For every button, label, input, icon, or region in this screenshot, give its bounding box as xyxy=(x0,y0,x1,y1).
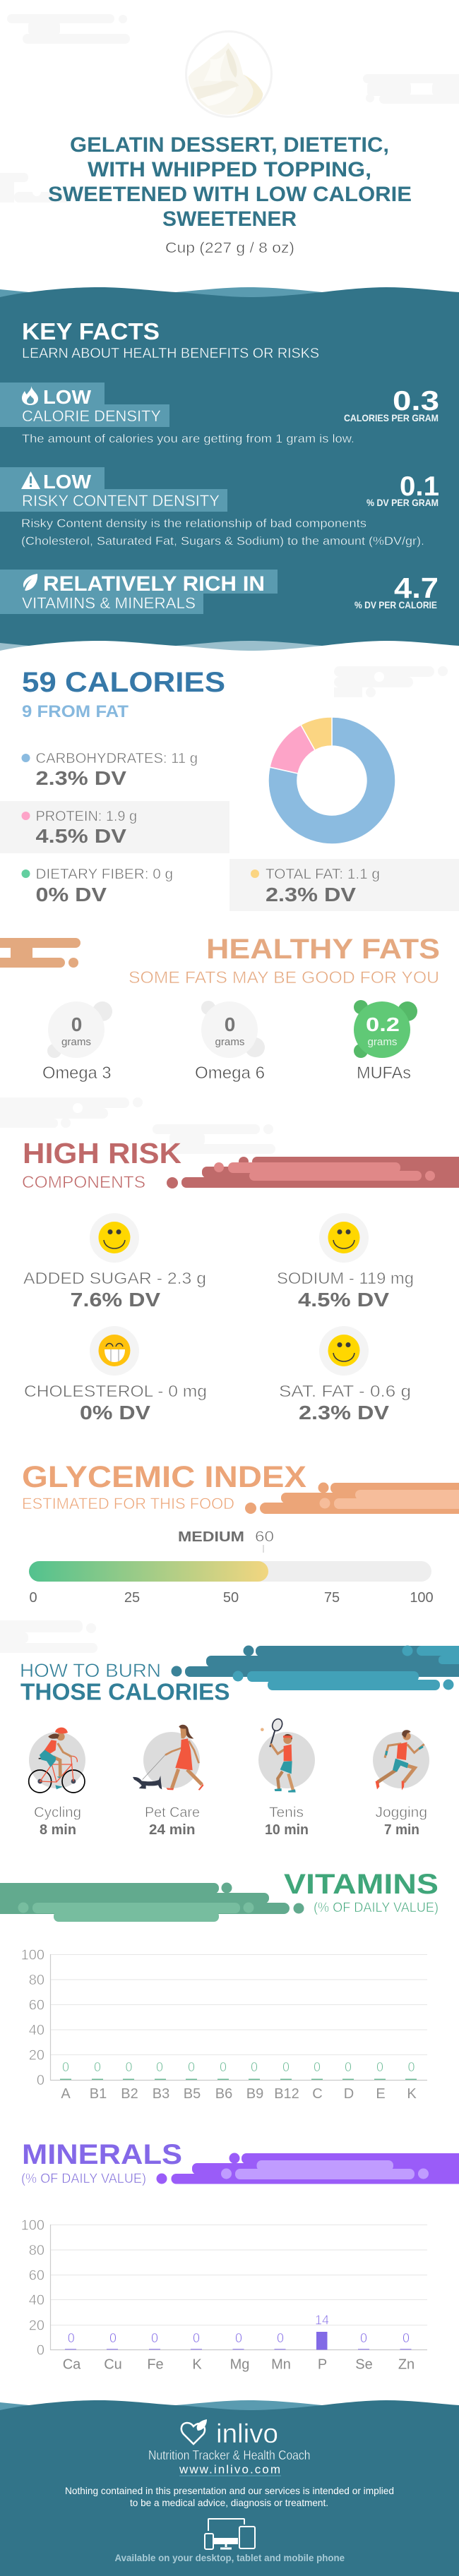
chart: minerals bar chart: Mg xyxy=(230,2357,249,2373)
risk: cholesterol xyxy=(24,1326,207,1424)
fact: vitamins and minerals: RELATIVELY RICH IN xyxy=(43,572,265,596)
chart: vitamins bar chart: B3 xyxy=(153,2086,169,2102)
chart: vitamins bar chart: 0 xyxy=(188,2060,195,2074)
fact: risky content density: LOW xyxy=(43,471,92,493)
heading: healthy fats: HEALTHY FATS xyxy=(206,934,440,965)
disclaimer: to be a medical advice, diagnosis or treatment. xyxy=(130,2497,328,2508)
heading: minerals: MINERALS xyxy=(22,2139,182,2170)
fact: risky content density: (Cholesterol, Saturated Fat, Sugars & Sodium) to the amount (%DV/gr). xyxy=(21,535,424,548)
chart: minerals bar chart: Mn xyxy=(271,2357,291,2373)
activity: cycling xyxy=(29,1728,85,1838)
fact: risky content density: % DV PER GRAM xyxy=(366,497,439,508)
chart: vitamins bar chart: 0 xyxy=(407,2060,415,2074)
fact: risky content density: RISKY CONTENT DENSITY xyxy=(22,492,220,510)
chart: vitamins bar chart: 80 xyxy=(29,1973,44,1988)
chart: minerals bar chart: 40 xyxy=(29,2292,44,2308)
legend: total fat: TOTAL FAT: 1.1 g xyxy=(266,867,380,882)
chart: glycemic index gauge: MEDIUM xyxy=(178,1529,244,1545)
chart: vitamins bar chart: 0 xyxy=(156,2060,163,2074)
risk: saturated fat xyxy=(279,1326,411,1424)
chart: vitamins bar chart: A xyxy=(61,2086,71,2102)
subheading: LEARN ABOUT HEALTH BENEFITS OR RISKS xyxy=(22,346,319,361)
subheading: estimated: ESTIMATED FOR THIS FOOD xyxy=(22,1495,234,1512)
legend: protein: 4.5% DV xyxy=(35,825,126,847)
fact: vitamins and minerals: VITAMINS & MINERALS xyxy=(22,594,196,612)
icon: grin xyxy=(99,1335,130,1366)
risk: added sugar: ADDED SUGAR - 2.3 g xyxy=(23,1269,206,1287)
chart: glycemic index gauge: 25 xyxy=(124,1590,140,1606)
chart: glycemic index gauge: 60 xyxy=(255,1529,274,1545)
fact: vitamins and minerals: 4.7 xyxy=(394,572,439,604)
chart: minerals bar chart: K xyxy=(192,2357,202,2373)
chart: minerals bar chart: Ca xyxy=(63,2357,81,2373)
chart: glycemic index gauge: 50 xyxy=(223,1590,239,1606)
chart: minerals bar chart xyxy=(21,2217,427,2373)
chart: vitamins bar chart: B9 xyxy=(246,2086,263,2102)
chart: minerals bar chart: Zn xyxy=(398,2357,415,2373)
chart: glycemic index gauge: 0 xyxy=(29,1590,37,1606)
title: GELATIN DESSERT, DIETETIC, xyxy=(70,133,389,157)
chart: minerals bar chart: 0 xyxy=(193,2331,200,2345)
risk: added sugar xyxy=(23,1213,206,1311)
subheading: components: COMPONENTS xyxy=(22,1173,145,1192)
heading: high risk: HIGH RISK xyxy=(23,1137,181,1169)
chart: minerals bar chart: Cu xyxy=(104,2357,122,2373)
activity: pet care: 24 min xyxy=(149,1822,195,1838)
icon: inlivo heart logo xyxy=(181,2419,207,2444)
title xyxy=(48,133,412,231)
chart: minerals bar chart: Se xyxy=(355,2357,373,2373)
chart: minerals bar chart: P xyxy=(318,2357,327,2373)
title: WITH WHIPPED TOPPING, xyxy=(88,158,371,181)
chart: vitamins bar chart: 0 xyxy=(220,2060,227,2074)
chart: vitamins bar chart: 0 xyxy=(94,2060,101,2074)
risk: saturated fat: 2.3% DV xyxy=(299,1402,389,1424)
chart: vitamins bar chart: 0 xyxy=(314,2060,321,2074)
chart: minerals bar chart: 80 xyxy=(29,2243,44,2258)
icon: warning triangle xyxy=(21,471,40,489)
fat: omega 3: grams xyxy=(61,1036,91,1048)
chart: minerals bar chart: 14 xyxy=(315,2313,329,2328)
decorative blob: burn calories xyxy=(171,1646,459,1690)
chart: vitamins bar chart: B5 xyxy=(184,2086,201,2102)
activity: tennis xyxy=(258,1717,315,1838)
chart: minerals bar chart: 0 xyxy=(109,2331,117,2345)
fat: MUFAs xyxy=(354,1000,417,1083)
decorative blob: healthy fats xyxy=(0,938,81,968)
fact: risky content density: Risky Content density is the relationship of bad components xyxy=(21,517,366,530)
fact: vitamins and minerals xyxy=(0,570,439,614)
fact: risky content density xyxy=(0,467,439,548)
risk: saturated fat: SAT. FAT - 0.6 g xyxy=(279,1382,411,1400)
website link: www.inlivo.com xyxy=(179,2463,280,2476)
chart: minerals bar chart: Fe xyxy=(147,2357,164,2373)
heading: calories: 59 CALORIES xyxy=(22,667,225,698)
chart: vitamins bar chart: 0 xyxy=(37,2073,44,2088)
title: SWEETENED WITH LOW CALORIE xyxy=(48,183,412,206)
legend: carbohydrates: 2.3% DV xyxy=(35,767,126,789)
risk: cholesterol: 0% DV xyxy=(80,1402,150,1424)
risk: added sugar: 7.6% DV xyxy=(71,1289,160,1311)
subheading: healthy fats: SOME FATS MAY BE GOOD FOR YOU xyxy=(129,968,439,987)
chart: glycemic index gauge: 75 xyxy=(324,1590,340,1606)
chart: vitamins bar chart: 0 xyxy=(376,2060,383,2074)
chart: vitamins bar chart: E xyxy=(376,2086,386,2102)
chart: minerals bar chart: 0 xyxy=(235,2331,242,2345)
fat: omega 3: Omega 3 xyxy=(42,1064,112,1083)
chart: vitamins bar chart: 100 xyxy=(21,1948,44,1963)
risk: sodium: SODIUM - 119 mg xyxy=(277,1269,414,1287)
icon: leaf xyxy=(23,574,37,591)
chart: vitamins bar chart: 40 xyxy=(29,2023,44,2038)
fact: calorie density xyxy=(0,383,439,445)
legend: carbohydrates: CARBOHYDRATES: 11 g xyxy=(35,751,198,766)
fat: omega 6: grams xyxy=(215,1036,244,1048)
activity: jogging xyxy=(373,1730,429,1838)
chart: minerals bar chart: 0 xyxy=(151,2331,158,2345)
icon: whipped cream food photo xyxy=(186,31,271,117)
chart: minerals bar chart: 0 xyxy=(68,2331,75,2345)
icon: devices xyxy=(205,2519,255,2549)
chart: vitamins bar chart: B12 xyxy=(274,2086,299,2102)
legend: carbohydrates xyxy=(21,751,198,789)
fat: MUFAs: MUFAs xyxy=(357,1064,411,1083)
activity: jogging: Jogging xyxy=(376,1805,427,1821)
panel: footer xyxy=(0,2400,459,2576)
heading: how to burn xyxy=(20,1660,230,1705)
heading: key facts: KEY FACTS xyxy=(22,318,160,344)
fat: MUFAs: grams xyxy=(367,1036,397,1048)
legend: dietary fiber xyxy=(21,867,173,905)
chart: vitamins bar chart: B1 xyxy=(90,2086,107,2102)
chart: vitamins bar chart: 0 xyxy=(345,2060,352,2074)
disclaimer xyxy=(65,2485,394,2508)
heading: how to burn: THOSE CALORIES xyxy=(20,1678,230,1705)
heading: how to burn: HOW TO BURN xyxy=(20,1660,161,1681)
fat: omega 3: 0 xyxy=(71,1013,82,1035)
activity: pet care: Pet Care xyxy=(145,1805,200,1821)
legend: protein xyxy=(0,801,230,853)
risk: sodium: 4.5% DV xyxy=(298,1289,389,1311)
fact: calorie density: 0.3 xyxy=(393,386,439,416)
activity: tennis: 10 min xyxy=(265,1822,309,1838)
chart: minerals bar chart: 60 xyxy=(29,2268,44,2284)
fact: calorie density: The amount of calories you are getting from 1 gram is low. xyxy=(22,433,354,445)
chart: vitamins bar chart: 20 xyxy=(29,2048,44,2064)
chart: minerals bar chart: 20 xyxy=(29,2318,44,2333)
chart: vitamins bar chart: 60 xyxy=(29,1997,44,2013)
activity: cycling: 8 min xyxy=(40,1822,76,1838)
subheading: calories from fat: 9 FROM FAT xyxy=(22,702,129,721)
fat: omega 6: Omega 6 xyxy=(195,1064,265,1083)
chart: glycemic index gauge: 100 xyxy=(410,1590,434,1606)
risk: sodium xyxy=(277,1213,414,1311)
activity: jogging: 7 min xyxy=(384,1822,419,1838)
activity: tennis: Tenis xyxy=(269,1805,304,1821)
chart: vitamins bar chart: 0 xyxy=(125,2060,133,2074)
icon: smile xyxy=(328,1222,360,1253)
fact: calorie density: LOW xyxy=(43,386,92,408)
chart: minerals bar chart: 0 xyxy=(277,2331,284,2345)
fact: calorie density: CALORIE DENSITY xyxy=(22,407,161,425)
activity: pet care xyxy=(133,1725,203,1838)
chart: vitamins bar chart: 0 xyxy=(62,2060,69,2074)
decorative blob: glycemic index xyxy=(245,1482,459,1514)
panel: key facts xyxy=(0,287,459,662)
decorative blob: minerals xyxy=(157,2153,459,2184)
risk: cholesterol: CHOLESTEROL - 0 mg xyxy=(24,1382,207,1400)
subheading: minerals: (% OF DAILY VALUE) xyxy=(21,2172,146,2186)
chart: vitamins bar chart: 0 xyxy=(251,2060,258,2074)
icon: flame xyxy=(22,386,38,405)
chart: vitamins bar chart xyxy=(21,1948,427,2102)
icon: smile xyxy=(328,1335,360,1366)
activity: cycling: Cycling xyxy=(34,1805,81,1821)
decorative blob: high risk xyxy=(167,1157,459,1188)
heading: vitamins: VITAMINS xyxy=(284,1869,439,1900)
title: SWEETENER xyxy=(162,207,297,231)
decorative blob: vitamins xyxy=(0,1883,304,1922)
fact: calorie density: CALORIES PER GRAM xyxy=(344,412,439,423)
legend: total fat: 2.3% DV xyxy=(266,884,356,905)
legend: dietary fiber: DIETARY FIBER: 0 g xyxy=(35,867,173,882)
chart: minerals bar chart: 0 xyxy=(360,2331,367,2345)
chart: minerals bar chart: 100 xyxy=(21,2217,44,2233)
serving size: Cup (227 g / 8 oz) xyxy=(165,240,294,256)
tagline: Nutrition Tracker & Health Coach xyxy=(148,2448,311,2462)
fat: omega 6 xyxy=(195,1001,265,1083)
chart: minerals bar chart: 0 xyxy=(403,2331,410,2345)
icon: smile xyxy=(99,1222,130,1253)
chart: glycemic index gauge xyxy=(29,1529,434,1606)
chart: vitamins bar chart: 0 xyxy=(282,2060,290,2074)
availability note: Available on your desktop, tablet and mobile phone xyxy=(114,2552,345,2563)
chart: vitamins bar chart: B6 xyxy=(215,2086,232,2102)
chart: vitamins bar chart: B2 xyxy=(121,2086,138,2102)
logo wordmark: inlivo xyxy=(216,2419,278,2449)
chart: vitamins bar chart: K xyxy=(407,2086,417,2102)
legend: protein: PROTEIN: 1.9 g xyxy=(35,809,137,824)
legend: total fat xyxy=(230,859,459,911)
heading: glycemic index: GLYCEMIC INDEX xyxy=(22,1460,306,1494)
subheading: vitamins: (% OF DAILY VALUE) xyxy=(314,1901,439,1915)
chart: minerals bar chart: 0 xyxy=(37,2343,44,2359)
fat: omega 3 xyxy=(42,1001,112,1083)
chart: vitamins bar chart: D xyxy=(344,2086,354,2102)
fat: MUFAs: 0.2 xyxy=(366,1013,400,1035)
fact: vitamins and minerals: % DV PER CALORIE xyxy=(354,599,437,610)
disclaimer: Nothing contained in this presentation and our services is intended or implied xyxy=(65,2485,394,2496)
fat: omega 6: 0 xyxy=(225,1013,235,1035)
fact: risky content density: 0.1 xyxy=(400,471,439,502)
legend: dietary fiber: 0% DV xyxy=(35,884,107,905)
chart: vitamins bar chart: C xyxy=(312,2086,323,2102)
chart: macronutrient donut xyxy=(268,717,395,844)
